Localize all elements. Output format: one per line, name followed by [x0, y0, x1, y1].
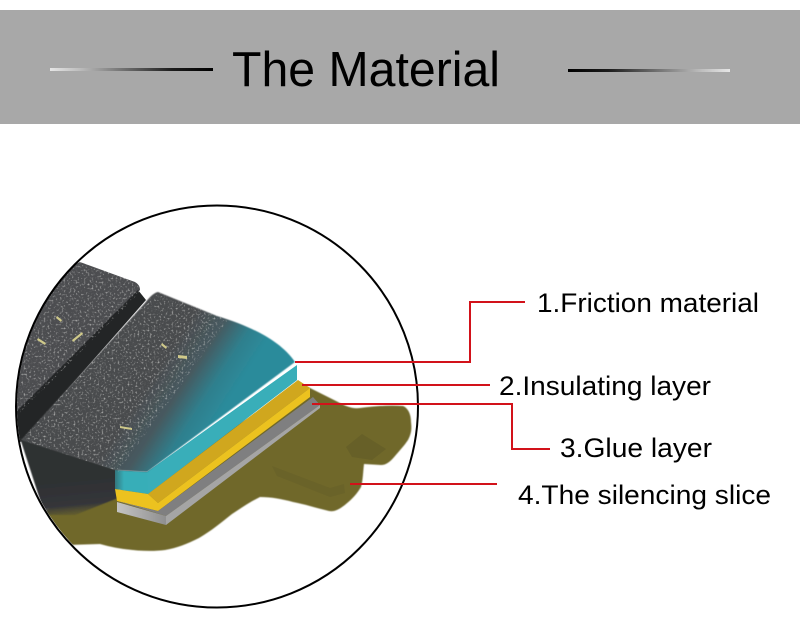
fibres	[37, 316, 187, 430]
friction texture	[17, 262, 227, 472]
leader 1	[295, 302, 525, 362]
leader 2	[302, 384, 490, 386]
leader 4	[350, 483, 497, 485]
front pad dark side	[20, 438, 118, 515]
label 2: 2.Insulating layer	[499, 371, 711, 401]
label 3: 3.Glue layer	[560, 433, 712, 463]
glue gray layer	[117, 397, 320, 516]
header band	[0, 10, 800, 124]
brake pad illustration	[0, 250, 411, 551]
leader 3	[312, 404, 550, 449]
left title rule	[50, 68, 213, 71]
silencing slice base plate	[40, 386, 411, 551]
right title rule	[568, 69, 730, 72]
silencing slice raised details	[346, 434, 386, 460]
title: The Material	[232, 43, 500, 97]
lens circle	[16, 206, 418, 608]
label 4: 4.The silencing slice	[518, 480, 771, 510]
back friction pad	[5, 262, 140, 415]
label 1: 1.Friction material	[537, 288, 759, 318]
friction layer top face	[21, 292, 295, 472]
friction layer side	[115, 365, 297, 494]
pad groove	[12, 290, 146, 442]
insulating yellow layer	[148, 380, 310, 503]
